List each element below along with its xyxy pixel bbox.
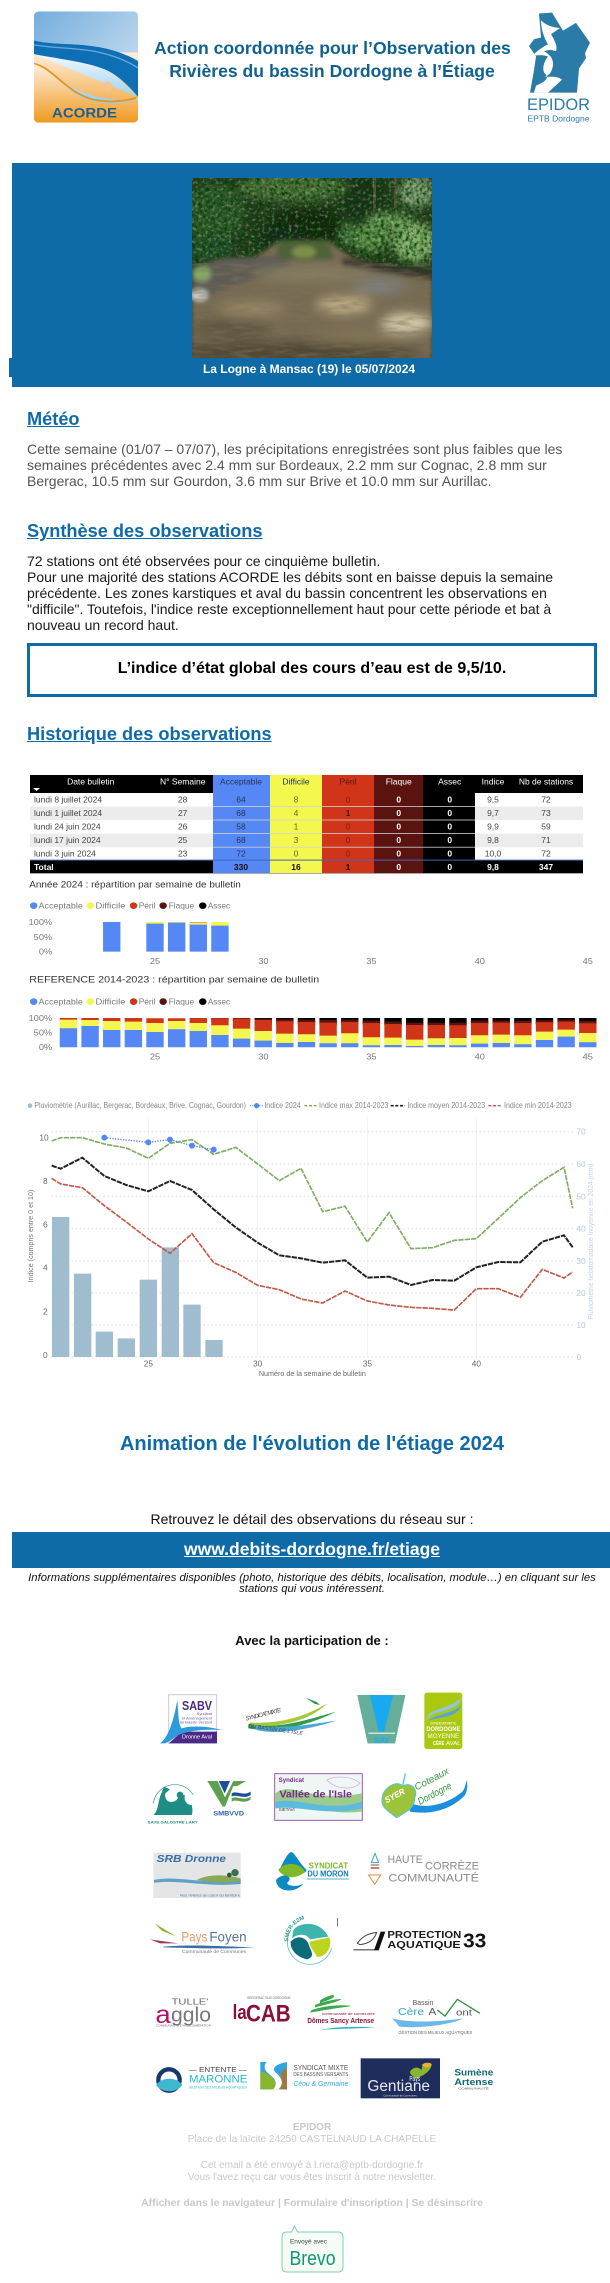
- table: bulletins: 0: [396, 835, 401, 845]
- chart legend: Indice 2024: [264, 1101, 301, 1110]
- chart: année 2024: 30: [258, 956, 269, 966]
- logo: syndicat vallée de l'Isle: [275, 1774, 362, 1820]
- axis: pluviométrie: 20: [576, 1288, 586, 1298]
- chart: année 2024: 25: [150, 956, 160, 966]
- logo: Entente Maronne: — ENTENTE —: [189, 2065, 248, 2074]
- logo: syndicat du Moron: SYNDICAT: [309, 1862, 348, 1870]
- logo: Sumène Artense: Sumène: [454, 2068, 493, 2078]
- chart grid: [52, 1117, 573, 1357]
- logo: SABV: Syndicat: [197, 1711, 213, 1716]
- logo: Pays Foyen: [150, 1924, 254, 1954]
- table: bulletins: 10,0: [485, 849, 502, 859]
- logo: SYER Coteaux de Dordogne: SYER: [383, 1786, 407, 1805]
- axis: pluviométrie: 0: [577, 1352, 582, 1362]
- table: bulletins: 0: [346, 849, 351, 859]
- logo: Tulle agglo: a: [155, 2001, 172, 2029]
- table: bulletins: Assec: [438, 777, 462, 787]
- text: informations supplémentaires: Informations supplémentaires disponibles (photo, historique des débits, localisation, module…) en cliquant sur les: [28, 1572, 596, 1584]
- heading: Historique des observations: Historique des observations: [27, 724, 272, 744]
- table: bulletins: 0: [447, 835, 452, 845]
- charts: répartition par semaine: [29, 880, 596, 1061]
- logo: Cère Amont: A: [428, 2007, 437, 2018]
- table: bulletins: 4: [294, 808, 299, 818]
- heading: Synthèse des observations: Synthèse des observations: [27, 521, 263, 541]
- footer: mention d'envoi: [188, 2160, 436, 2182]
- logo: Dômes Sancy Artense: communauté de communes: [322, 2012, 375, 2016]
- table: bulletins: 59: [541, 822, 551, 832]
- table: bulletins: 0: [447, 822, 452, 832]
- logo: Dordogne moyenne Cère aval: AVAL: [446, 1741, 461, 1747]
- table: bulletins: 0: [346, 795, 351, 805]
- table: bulletins: 0: [447, 862, 452, 872]
- table: bulletins: 0: [447, 849, 452, 859]
- chart: référence 2014-2023: 25: [150, 1052, 160, 1061]
- chart: année 2024: Assec: [208, 901, 231, 910]
- logo: Cère Amont: ont: [456, 2007, 473, 2017]
- chart: référence 2014-2023: 0%: [39, 1043, 52, 1052]
- table: bulletins: Nb de stations: [519, 777, 573, 787]
- logo: Dordogne moyenne Cère aval: CÈRE: [433, 1739, 444, 1747]
- chart: année 2024: Flaque: [169, 901, 194, 910]
- chart: année 2024: 45: [583, 956, 593, 966]
- logo: Entente Maronne: GESTION DES MILIEUX AQUATIQUES: [189, 2086, 248, 2090]
- text: retrouvez: Retrouvez le détail des observations du réseau sur :: [151, 1511, 473, 1527]
- axis: indice: [28, 1133, 481, 1378]
- axis: pluviométrie: 70: [576, 1127, 586, 1137]
- chart: année 2024: Acceptable: [38, 901, 83, 910]
- table: bulletins: 1: [346, 862, 351, 872]
- table: bulletins: 1: [294, 822, 299, 832]
- table: bulletins: 28: [178, 795, 188, 805]
- table: bulletins: N° Semaine: [160, 777, 206, 787]
- axis: indice: 6: [43, 1219, 48, 1229]
- chart: référence 2014-2023: Péril: [139, 997, 155, 1006]
- logo: Cère Amont: GESTION DES MILIEUX AQUATIQUES: [398, 2030, 472, 2035]
- table: bulletins: 9,8: [487, 862, 499, 872]
- axis: indice: Indice (compris entre 0 et 10): [28, 1190, 35, 1282]
- table: bulletins: 3: [294, 835, 299, 845]
- table: bulletins: 68: [236, 835, 246, 845]
- table: bulletins: 64: [236, 795, 246, 805]
- logo: syndicat mixte Céou et Germaine: DES BASSINS VERSANTS: [293, 2072, 349, 2078]
- logo: Dômes Sancy Artense: Dômes Sancy Artense: [307, 2016, 374, 2025]
- logo: syndicat mixte Céou et Germaine: SYNDICAT MIXTE: [293, 2063, 348, 2072]
- axis: pluviométrie: 10: [576, 1320, 586, 1330]
- text: informations supplémentaires: [28, 1572, 596, 1595]
- chart: référence 2014-2023: REFERENCE 2014-2023 : répartition par semaine de bulletin: [29, 975, 319, 986]
- logo: Pays Foyen: Foyen: [209, 1929, 247, 1945]
- logo: Haute-Corrèze communauté: HAUTE: [388, 1854, 423, 1866]
- chart legend: Indice moyen 2014-2023: [407, 1101, 485, 1110]
- text: synthèse: 72 stations ont été observées pour ce cinquième bulletin.: [27, 553, 380, 569]
- chart: année 2024: Péril: [139, 901, 155, 910]
- logo: SMBVVD: SMBVVD: [213, 1810, 244, 1818]
- logo: Pays de la Gentiane: Gentiane: [367, 2078, 430, 2095]
- axis: indice: 40: [472, 1358, 481, 1368]
- logo: syndicat mixte du bassin de l'Isle: DU BASSIN DE L'ISLE: [248, 1723, 304, 1737]
- logo: Tulle agglo: COMMUNAUTÉ D'AGGLOMÉRATION: [156, 2023, 211, 2028]
- logo: SRB Dronne: [153, 1853, 241, 1898]
- chart legend: Indice max 2014-2023: [319, 1101, 389, 1110]
- table: bulletins: 71: [541, 835, 551, 845]
- axis: pluviométrie: 40: [576, 1224, 586, 1234]
- table: bulletins: 0: [346, 835, 351, 845]
- chart: année 2024: 40: [475, 956, 485, 966]
- line: indice max: [52, 1138, 573, 1249]
- chart: année 2024: 35: [366, 956, 377, 966]
- footer: adresse: Place de la laïcite 24250 CASTELNAUD LA CHAPELLE: [188, 2134, 436, 2144]
- table: bulletins: [30, 775, 583, 874]
- axis: indice: Numéro de la semaine de bulletin: [259, 1371, 366, 1378]
- logo: Pays de la Gentiane: [361, 2058, 440, 2098]
- table: bulletins: Total: [34, 862, 54, 872]
- chart: référence 2014-2023: 30: [258, 1052, 269, 1061]
- logo: Sumène Artense: COMMUNAUTÉ: [458, 2085, 489, 2090]
- text: synthèse: [27, 553, 553, 633]
- table: bulletins: 26: [178, 822, 188, 832]
- footer: liens: Afficher dans le navigateur | Formulaire d'inscription | Se désinscrire: [141, 2198, 483, 2208]
- logo: Tulle agglo: [155, 1997, 211, 2029]
- chart: référence 2014-2023: Assec: [208, 997, 231, 1006]
- logo: Protection Aquatique 33: PROTECTION: [387, 1930, 461, 1941]
- table: bulletins: 0: [396, 795, 401, 805]
- table: bulletins: Difficile: [282, 777, 310, 787]
- chart: référence 2014-2023: 40: [475, 1052, 485, 1061]
- chart: référence 2014-2023: Difficile: [95, 997, 126, 1006]
- axis: indice: 4: [43, 1263, 48, 1273]
- logo: Dordogne moyenne Cère aval: SYNDICAT MIXTE: [430, 1722, 457, 1726]
- logo: syndicat mixte du bassin de l'Isle: [245, 1697, 337, 1737]
- logo: Protection Aquatique 33: 33: [463, 1930, 486, 1952]
- text: météo: [27, 441, 562, 489]
- logo: syndicat mixte Céou et Germaine: Céou & Germaine: [293, 2079, 348, 2088]
- table: bulletins: 0: [346, 822, 351, 832]
- logo: Haute-Corrèze communauté: [369, 1853, 479, 1884]
- text: synthèse: précédente. Les zones karstiques et aval du bassin concentrent les observations en: [27, 585, 547, 601]
- logo: la CAB: [233, 1996, 291, 2028]
- footer: mention d'envoi: Vous l'avez reçu car vous êtes inscrit à notre newsletter.: [188, 2172, 436, 2182]
- table: bulletins: 25: [178, 835, 188, 845]
- table: bulletins: 73: [541, 808, 551, 818]
- panel: photo band: [12, 163, 610, 387]
- logo: syndicat mixte du bassin de l'Isle: SYNDICAT MIXTE: [245, 1708, 283, 1723]
- table: bulletins: 0: [294, 849, 299, 859]
- bars: pluviométrie: [52, 1217, 223, 1357]
- logo: Pays Foyen: Pays: [181, 1929, 207, 1945]
- table: bulletins: 347: [539, 862, 553, 872]
- table: bulletins: 9,8: [487, 835, 499, 845]
- badge: Brevo: Brevo: [290, 2248, 336, 2270]
- chart: année 2024: Difficile: [95, 901, 126, 910]
- title: Action coordonnée pour l’Observation des: [154, 38, 511, 58]
- chart: année 2024: 50%: [34, 933, 52, 942]
- table: bulletins: 72: [541, 849, 551, 859]
- table: bulletins: 72: [236, 849, 246, 859]
- table: bulletins: 9,5: [487, 795, 499, 805]
- chart: année 2024: 0%: [39, 947, 52, 956]
- axis: pluviométrie: 30: [576, 1256, 586, 1266]
- logo: Protection Aquatique 33: AQUATIQUE: [387, 1940, 461, 1951]
- logo: Entente Maronne: [156, 2065, 248, 2091]
- table: bulletins: lundi 8 juillet 2024: [34, 795, 102, 805]
- logo: SABV: Dronne Aval: [182, 1734, 212, 1740]
- axis: indice: 0: [43, 1350, 48, 1360]
- band notch: [9, 358, 13, 377]
- table: bulletins: Péril: [339, 777, 357, 787]
- table: bulletins: 330: [234, 862, 248, 872]
- line: indice 2024: [101, 1135, 217, 1153]
- logo: syndicat vallée de l'Isle: SIETAVI: [279, 1807, 295, 1812]
- logo: Cère Amont: [392, 1998, 480, 2035]
- logo: SMER E2M: SMER-E2M: [284, 1916, 304, 1942]
- logo: SYER Coteaux de Dordogne: Dordogne: [416, 1781, 454, 1808]
- text: météo: Cette semaine (01/07 – 07/07), les précipitations enregistrées sont plus faibles que les: [27, 441, 562, 457]
- logo: Haute-Corrèze communauté: COMMUNAUTÉ: [388, 1871, 479, 1884]
- logos: partenaires: [148, 1692, 493, 2098]
- logo: SYER Coteaux de Dordogne: Coteaux: [413, 1766, 452, 1793]
- axis: indice: 25: [144, 1358, 153, 1368]
- heading: Météo: Météo: [27, 409, 80, 429]
- photo: La Logne à Mansac: [192, 178, 432, 358]
- logo: SABV: SABV: [182, 1698, 212, 1713]
- heading: animation: Animation de l'évolution de l'étiage 2024: [120, 1433, 504, 1455]
- title: Rivières du bassin Dordogne à l’Étiage: [169, 60, 495, 80]
- callout: indice global: [27, 643, 597, 697]
- chart: référence 2014-2023: 100%: [29, 1013, 52, 1023]
- footer: mention d'envoi: Cet email a été envoyé à l.riera@eptb-dordogne.fr: [201, 2160, 423, 2171]
- chart legend: Pluviométrie (Aurillac, Bergerac, Bordeaux, Brive, Cognac, Gourdon): [34, 1101, 246, 1110]
- logo: SRB Dronne: Nos rivières au cœur du territoire: [180, 1892, 241, 1898]
- logo: syndicat du Moron: [276, 1852, 349, 1890]
- text: synthèse: Pour une majorité des stations ACORDE les débits sont en baisse depuis la semaine: [27, 569, 553, 585]
- table: bulletins: Acceptable: [220, 777, 262, 787]
- logo: Cère Amont: Cère: [398, 2007, 424, 2018]
- logo: Tulle agglo: TULLE': [172, 1997, 209, 2007]
- footer: adresse: EPIDOR: [293, 2122, 331, 2133]
- badge: Brevo: Envoyé avec: [290, 2238, 328, 2246]
- axis: pluviométrie: [576, 1127, 595, 1362]
- axis: pluviométrie: Pluviométrie hebdomadaire moyenne en 2024 (mm): [588, 1164, 595, 1320]
- table: bulletins: lundi 1 juillet 2024: [34, 808, 102, 818]
- axis: indice: 8: [43, 1176, 48, 1186]
- logo: la CAB: CAB: [246, 2000, 291, 2028]
- text: informations supplémentaires: stations qui vous intéressent.: [239, 1583, 385, 1595]
- logo: Dômes Sancy Artense: [307, 1995, 376, 2030]
- logo: SYER Coteaux de Dordogne: [382, 1766, 467, 1818]
- photo caption: La Logne à Mansac (19) le 05/07/2024: [203, 362, 415, 376]
- logo: Dordogne moyenne Cère aval: MOYENNE: [428, 1733, 459, 1740]
- chart legend: [28, 1101, 572, 1110]
- table: bulletins: 72: [541, 795, 551, 805]
- logo: SMER E2M: [284, 1916, 338, 1965]
- table: bulletins: Indice: [482, 777, 505, 787]
- table: bulletins: 68: [236, 808, 246, 818]
- logo: EPIDOR: [527, 12, 590, 124]
- table: bulletins: 8: [294, 795, 299, 805]
- logo: Entente Maronne: MARONNE: [189, 2073, 247, 2085]
- table: bulletins: lundi 17 juin 2024: [34, 835, 101, 845]
- chart: année 2024: Année 2024 : répartition par semaine de bulletin: [29, 880, 241, 891]
- chart legend: Indice min 2014-2023: [504, 1101, 572, 1110]
- logo: Pays de la Gentiane: Communauté de Communes: [383, 2093, 417, 2097]
- logo: SIAV: SIAV: [374, 1735, 389, 1745]
- logo: SABV: [160, 1695, 222, 1743]
- table: bulletins: lundi 3 juin 2024: [34, 849, 96, 859]
- table: bulletins: 27: [178, 808, 188, 818]
- table: bulletins: 9,9: [487, 822, 499, 832]
- logo: Protection Aquatique 33: [353, 1930, 486, 1952]
- table: bulletins: 0: [396, 862, 401, 872]
- logo: Pays Foyen: Communauté de Communes: [182, 1949, 247, 1954]
- chart: indice et pluviométrie: [28, 1101, 595, 1378]
- chart: référence 2014-2023: 50%: [34, 1028, 52, 1037]
- line: indice moyen: [52, 1158, 573, 1285]
- table: bulletins: 9,7: [487, 808, 499, 818]
- table: bulletins: lundi 24 juin 2024: [34, 822, 101, 832]
- panel: lien band: [12, 1532, 610, 1568]
- logo: syndicat mixte Céou et Germaine: [260, 2061, 349, 2089]
- panel: lien band: www.debits-dordogne.fr/etiage: [184, 1539, 440, 1559]
- table: bulletins: 16: [291, 862, 301, 872]
- logo: Pays de la Gentiane: Pays: [409, 2074, 420, 2083]
- chart: référence 2014-2023: Acceptable: [38, 997, 83, 1006]
- axis: indice: 30: [253, 1358, 263, 1368]
- table: bulletins: 1: [346, 808, 351, 818]
- heading: participation: Avec la participation de :: [235, 1633, 389, 1648]
- logo: Save Galostre Lary: SAVE GALOSTRE LARY: [148, 1820, 198, 1824]
- logo: ACORDE: ACORDE: [52, 106, 117, 121]
- table: bulletins: 0: [447, 808, 452, 818]
- logo: Cère Amont: Bassin: [413, 1998, 433, 2007]
- logo: SABV: du Bassin Versant: [180, 1719, 213, 1724]
- table: bulletins: 0: [396, 822, 401, 832]
- chart: année 2024: [29, 880, 593, 966]
- logo: Haute-Corrèze communauté: CORRÈZE: [425, 1859, 479, 1872]
- axis: indice: 2: [43, 1306, 48, 1316]
- chart: référence 2014-2023: 35: [366, 1052, 377, 1061]
- table: bulletins: Flaque: [386, 777, 412, 787]
- chart: référence 2014-2023: [29, 975, 596, 1061]
- text: météo: semaines précédentes avec 2.4 mm sur Bordeaux, 2.2 mm sur Cognac, 2.8 mm sur: [27, 457, 547, 473]
- logo: SIAV: [357, 1695, 405, 1745]
- table: bulletins: Date bulletin: [67, 777, 115, 787]
- axis: pluviométrie: 60: [576, 1159, 586, 1169]
- axis: indice: 35: [363, 1358, 372, 1368]
- chart: référence 2014-2023: 45: [583, 1052, 593, 1061]
- logo: SRB Dronne: SRB Dronne: [157, 1854, 227, 1865]
- logo: syndicat du Moron: DU MORON: [307, 1870, 349, 1878]
- logo: SMBVVD: [207, 1781, 251, 1818]
- text: météo: Bergerac, 10.5 mm sur Gourdon, 3.6 mm sur Brive et 10.0 mm sur Aurillac.: [27, 473, 492, 489]
- logo: Dordogne moyenne Cère aval: DORDOGNE: [426, 1726, 461, 1733]
- axis: indice: 10: [39, 1133, 49, 1143]
- logo: syndicat vallée de l'Isle: Syndicat: [279, 1777, 305, 1784]
- table: bulletins: 0: [396, 808, 401, 818]
- logo: Save Galostre Lary: [148, 1785, 198, 1824]
- title: [154, 38, 511, 80]
- table: bulletins: 0: [396, 849, 401, 859]
- logo: Sumène Artense: Artense: [454, 2077, 493, 2087]
- logo: la CAB: BERGERAC SUD DORDOGNE: [247, 1996, 291, 2000]
- logo: Dordogne moyenne Cère aval: [424, 1693, 462, 1749]
- logo: Tulle agglo: gglo: [171, 2004, 211, 2026]
- table: bulletins: 0: [447, 795, 452, 805]
- badge: Brevo: [282, 2225, 344, 2272]
- table: bulletins: 23: [178, 849, 188, 859]
- table: bulletins: 58: [236, 822, 246, 832]
- logo: Sumène Artense: [454, 2068, 493, 2090]
- chart: référence 2014-2023: Flaque: [169, 997, 194, 1006]
- text: synthèse: "difficile". Toutefois, l'indice reste exceptionnellement haut pour cette période et bat à: [27, 601, 551, 617]
- line: indice min: [52, 1178, 573, 1310]
- logo: la CAB: la: [233, 2001, 247, 2024]
- axis: pluviométrie: 50: [576, 1191, 586, 1201]
- text: synthèse: nouveau un record haut.: [27, 617, 179, 633]
- logo: ACORDE: [34, 12, 138, 123]
- callout: indice global: L’indice d’état global des cours d’eau est de 9,5/10.: [118, 660, 506, 677]
- footer: adresse: [188, 2122, 436, 2144]
- logo: SABV: et Aménagement: [182, 1715, 213, 1720]
- chart: année 2024: 100%: [29, 918, 52, 927]
- logo: syndicat vallée de l'Isle: Vallée de l'Isle: [279, 1790, 352, 1800]
